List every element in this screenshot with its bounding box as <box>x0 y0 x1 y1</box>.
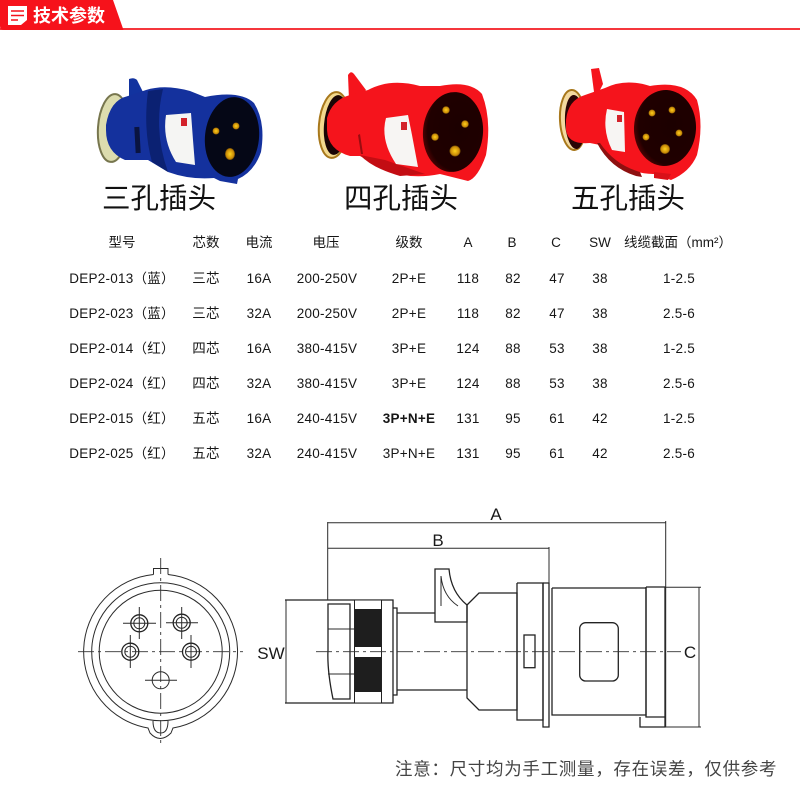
table header row: 线缆截面（mm²） <box>624 235 732 250</box>
table header row: 型号 <box>108 235 136 250</box>
dimension label A: A <box>490 505 502 524</box>
table header row: 电压 <box>312 235 340 250</box>
cable gland nut <box>285 600 397 703</box>
row DEP2-023: 38 <box>592 306 608 321</box>
row DEP2-014: 1-2.5 <box>663 341 695 356</box>
row DEP2-025: DEP2-025（红） <box>69 446 175 461</box>
row DEP2-024: 53 <box>549 376 565 391</box>
pins <box>642 106 682 154</box>
row DEP2-023: 47 <box>549 306 565 321</box>
pins <box>212 122 240 160</box>
socket face <box>420 90 486 174</box>
row DEP2-024: 380-415V <box>297 376 357 391</box>
row DEP2-015: DEP2-015（红） <box>69 411 175 426</box>
row DEP2-013: 16A <box>247 271 271 286</box>
row DEP2-024: DEP2-024（红） <box>69 376 175 391</box>
row DEP2-014: 124 <box>456 341 480 356</box>
row DEP2-024: 88 <box>505 376 521 391</box>
product: red five-pin plug <box>558 68 700 180</box>
header title: 技术参数 <box>33 5 105 26</box>
technical drawing: front view <box>78 558 243 745</box>
row DEP2-024: 38 <box>592 376 608 391</box>
row DEP2-025 <box>69 446 695 461</box>
row DEP2-014: 53 <box>549 341 565 356</box>
row DEP2-013: 2P+E <box>392 271 426 286</box>
icon: document <box>8 6 27 25</box>
side slot <box>524 635 535 668</box>
neck and locking clip <box>397 569 467 690</box>
row DEP2-023: DEP2-023（蓝） <box>69 306 175 321</box>
dimension label SW: SW <box>257 644 285 663</box>
dimension label C: C <box>684 643 696 662</box>
label window <box>580 623 618 681</box>
row DEP2-013 <box>69 271 695 286</box>
row DEP2-014: 38 <box>592 341 608 356</box>
specification table <box>69 235 732 461</box>
label <box>384 115 418 167</box>
row DEP2-014 <box>69 341 695 356</box>
row DEP2-014: 16A <box>247 341 271 356</box>
table header row: 芯数 <box>192 235 220 250</box>
technical drawing: side view <box>285 569 681 727</box>
table header row: 电流 <box>246 235 273 250</box>
row DEP2-025: 95 <box>505 446 521 461</box>
table header row: 级数 <box>396 235 423 250</box>
row DEP2-015: 五芯 <box>192 411 220 426</box>
row DEP2-013: 200-250V <box>297 271 357 286</box>
product: red four-pin plug <box>316 72 488 181</box>
row DEP2-025: 3P+N+E <box>383 446 435 461</box>
row DEP2-025: 五芯 <box>192 446 220 461</box>
row DEP2-015: 16A <box>247 411 271 426</box>
row DEP2-024: 3P+E <box>392 376 426 391</box>
row DEP2-025: 32A <box>247 446 271 461</box>
row DEP2-023: 118 <box>457 306 479 321</box>
row DEP2-014: DEP2-014（红） <box>69 341 175 356</box>
pin holes <box>122 607 200 689</box>
row DEP2-023: 82 <box>505 306 521 321</box>
center line <box>316 651 681 653</box>
dimension label B: B <box>432 531 444 550</box>
label <box>605 109 625 152</box>
row DEP2-025: 131 <box>456 446 480 461</box>
row DEP2-023: 200-250V <box>297 306 357 321</box>
section header: 技术参数 <box>0 0 800 30</box>
row DEP2-023: 三芯 <box>192 306 220 321</box>
row DEP2-015: 3P+N+E <box>383 411 435 426</box>
pins <box>431 106 469 156</box>
row DEP2-014: 88 <box>505 341 521 356</box>
row DEP2-013: 82 <box>505 271 521 286</box>
row DEP2-025: 61 <box>549 446 565 461</box>
row DEP2-023: 2P+E <box>392 306 426 321</box>
row DEP2-013: 38 <box>592 271 608 286</box>
socket face <box>201 94 263 180</box>
caption: three-pin: 三孔插头 <box>102 183 216 215</box>
row DEP2-025: 2.5-6 <box>663 446 695 461</box>
row DEP2-013: DEP2-013（蓝） <box>69 271 175 286</box>
row DEP2-015: 131 <box>456 411 480 426</box>
row DEP2-023: 32A <box>247 306 271 321</box>
row DEP2-024: 2.5-6 <box>663 376 695 391</box>
row DEP2-023: 2.5-6 <box>663 306 695 321</box>
row DEP2-023 <box>69 306 695 321</box>
row DEP2-025: 42 <box>592 446 608 461</box>
label <box>165 113 195 165</box>
dimension lines <box>257 505 701 727</box>
table header row: SW <box>589 235 611 250</box>
row DEP2-013: 47 <box>549 271 565 286</box>
table header row <box>108 235 732 250</box>
row DEP2-013: 三芯 <box>192 271 220 286</box>
row DEP2-015: 61 <box>549 411 565 426</box>
row DEP2-014: 四芯 <box>192 341 220 356</box>
row DEP2-013: 1-2.5 <box>663 271 695 286</box>
row DEP2-015: 240-415V <box>297 411 357 426</box>
caption: four-pin: 四孔插头 <box>344 183 458 215</box>
caption: five-pin: 五孔插头 <box>571 183 685 215</box>
row DEP2-014: 3P+E <box>392 341 426 356</box>
main housing <box>467 583 665 727</box>
footnote: 注意：尺寸均为手工测量，存在误差，仅供参考 <box>395 759 777 779</box>
row DEP2-013: 118 <box>457 271 479 286</box>
table header row: C <box>551 235 561 250</box>
row DEP2-025: 240-415V <box>297 446 357 461</box>
table header row: A <box>463 235 473 250</box>
row DEP2-015: 95 <box>505 411 521 426</box>
row DEP2-024 <box>69 376 695 391</box>
row DEP2-014: 380-415V <box>297 341 357 356</box>
table header row: B <box>507 235 517 250</box>
product: blue three-pin plug <box>96 78 263 184</box>
row DEP2-015 <box>69 411 695 426</box>
row DEP2-024: 124 <box>456 376 480 391</box>
socket face <box>632 88 698 168</box>
row DEP2-015: 42 <box>592 411 608 426</box>
row DEP2-024: 32A <box>247 376 271 391</box>
row DEP2-024: 四芯 <box>192 376 220 391</box>
row DEP2-015: 1-2.5 <box>663 411 695 426</box>
